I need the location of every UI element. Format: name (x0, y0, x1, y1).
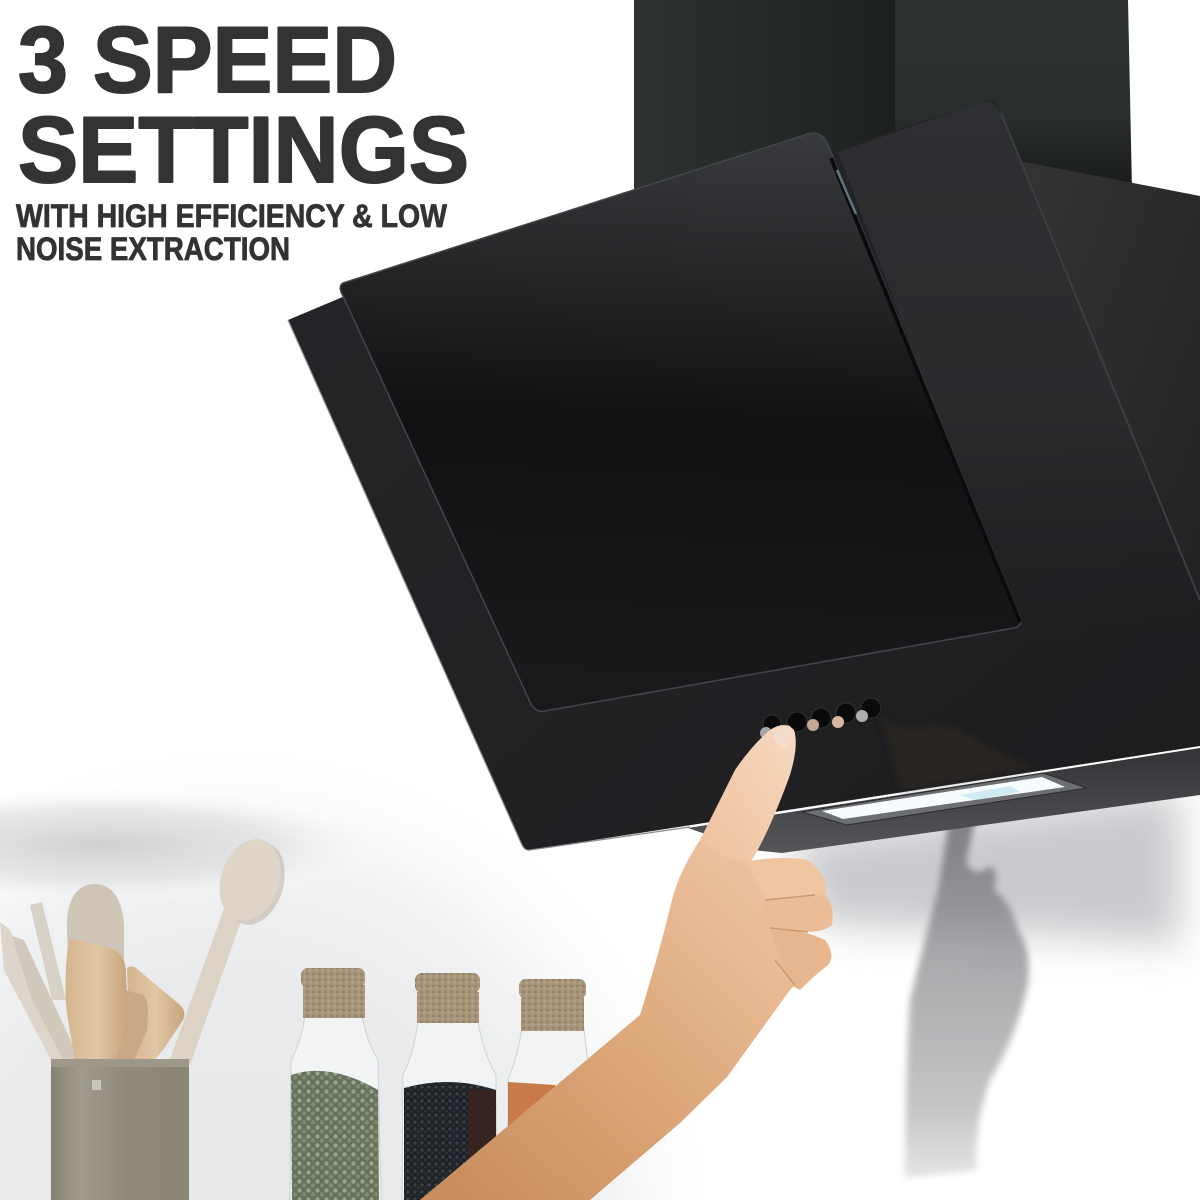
hand shadow on wall (905, 815, 1029, 1178)
title: 3 speed settings (18, 7, 469, 202)
hood glass light rim (288, 320, 690, 850)
chimney duct (634, 0, 1132, 200)
ceramic utensil pot (51, 1059, 189, 1200)
hand and forearm (420, 725, 833, 1200)
subtitle (16, 198, 448, 267)
utensils in pot (0, 831, 295, 1065)
subtitle: WITH HIGH EFFICIENCY & LOW (16, 198, 448, 234)
hood centre glass strip (838, 102, 1200, 660)
pale spatulas (0, 922, 78, 1065)
hood main glass panel (288, 100, 1200, 850)
subtitle: NOISE EXTRACTION (16, 231, 290, 267)
hood right panel edge (1001, 113, 1200, 600)
LED light panel (802, 773, 1087, 825)
panel seam with blue highlight (831, 158, 1020, 622)
control knobs (760, 698, 881, 739)
title: 3 speed settings: SETTINGS (18, 97, 469, 202)
front wood spatula (66, 940, 128, 1065)
hood right rear panel (1020, 161, 1200, 640)
jar of green lentils (290, 968, 381, 1200)
rear spoon (67, 884, 124, 975)
arm and back of hand (420, 840, 805, 1200)
middle wood spatula (110, 990, 148, 1065)
hood underside (688, 748, 1200, 853)
title: 3 speed settings: 3 SPEED (18, 7, 397, 112)
folded fingers (745, 858, 833, 990)
fingernail (773, 725, 792, 748)
finger reflection in glass (880, 716, 1035, 790)
jar of red lentils (508, 979, 590, 1180)
hood front glass panel (340, 133, 1021, 711)
right wood spatula (127, 966, 184, 1065)
large wooden spoon (168, 831, 295, 1065)
jar of black lentils (402, 973, 497, 1200)
slotted tongs (30, 902, 66, 1000)
pointing finger (700, 725, 796, 861)
